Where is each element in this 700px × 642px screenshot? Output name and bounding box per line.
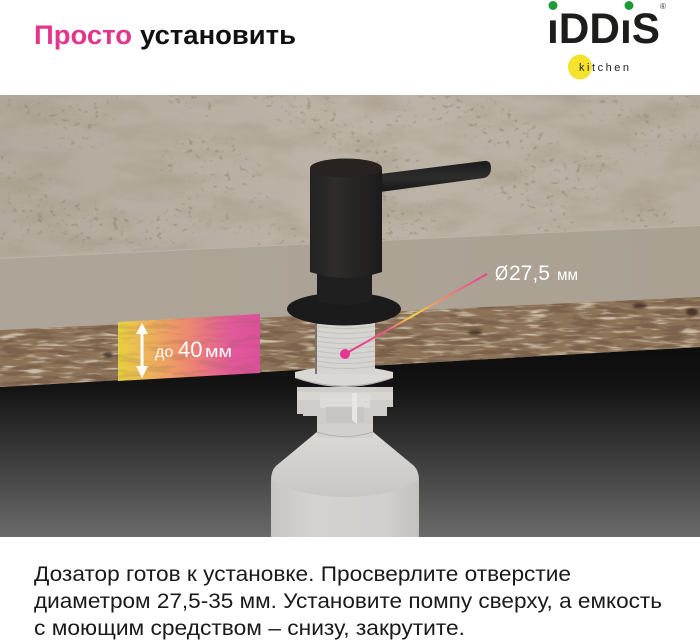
- logo wordmark: ıDDıS: [547, 5, 660, 53]
- callout dot: [340, 349, 350, 359]
- description text: диаметром 27,5-35 мм. Установите помпу сверху, а емкость: [34, 590, 662, 613]
- photo: countertop installation scene: [0, 95, 700, 537]
- thickness label: [118, 314, 260, 381]
- thickness text: до: [155, 344, 173, 361]
- title: Просто: [34, 20, 132, 50]
- worktop surface band: [0, 225, 700, 335]
- description text: Дозатор готов к установке. Просверлите отверстие: [34, 563, 571, 586]
- dispenser body: [310, 159, 382, 278]
- diameter text: 27,5: [509, 262, 550, 285]
- dispenser spout: [373, 161, 491, 192]
- diameter text: Ø: [495, 263, 508, 285]
- logo kitchen text: kitchen: [579, 62, 629, 74]
- plastic nut: [295, 366, 393, 424]
- diameter text: мм: [557, 267, 578, 284]
- logo: IDDIS kitchen: [547, 1, 666, 80]
- dispenser neck: [317, 274, 372, 295]
- description text: [34, 563, 662, 640]
- flange: [287, 292, 401, 326]
- thickness text: мм: [205, 342, 232, 361]
- double arrow: [136, 323, 148, 378]
- logo green dots: [548, 1, 634, 10]
- under-counter dark background: [0, 347, 700, 537]
- dispenser top cap: [310, 158, 382, 178]
- logo yellow blob: [568, 54, 592, 80]
- thickness text: 40: [178, 337, 202, 362]
- bottle: [271, 423, 419, 537]
- wall: [0, 95, 700, 275]
- title: [34, 20, 296, 50]
- stone edge: [0, 297, 700, 387]
- title: установить: [140, 20, 296, 50]
- logo registered mark: ®: [660, 2, 666, 11]
- description text: с моющим средством – снизу, закрутите.: [34, 617, 465, 640]
- threaded shaft: [315, 318, 375, 374]
- diameter text: [496, 265, 577, 283]
- callout leader line: [345, 274, 487, 354]
